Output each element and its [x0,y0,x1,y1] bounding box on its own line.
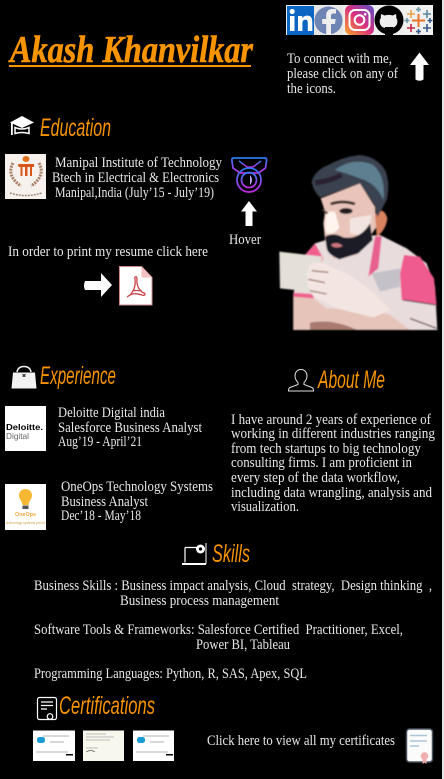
heading: education: Education [40,114,111,142]
text: business skills: Business process management [120,593,279,609]
heading: certifications [38,692,155,720]
logo: oneops: OneOps [15,512,36,518]
logo: deloitte digital: Digital [6,431,29,441]
text: view certificates: Click here to view all my certificates [207,733,395,749]
text: deloitte role: Salesforce Business Analyst [58,420,202,436]
icon: person [288,370,314,391]
hand [307,263,391,317]
icon: linkedin [287,6,314,35]
portrait photo [279,155,437,330]
cup [279,252,323,292]
heading: about me [288,366,385,394]
heading: experience: Experience [40,362,116,390]
logo: oneops: technology systems pvt ltd [6,521,45,525]
icon: facebook [314,6,343,35]
text: oneops role: Business Analyst [61,494,148,510]
text: connect note: the icons. [287,81,336,97]
title: name: Akash Khanvilkar [8,29,254,71]
torso [293,235,437,330]
social icons row [286,5,433,35]
text: oneops role: Dec’18 - May’18 [61,508,141,524]
text: oneops role [61,479,213,524]
logo: deloitte digital: Deloitte. [6,422,43,432]
icon: tableau [404,5,433,35]
arrow: up to medal [241,201,257,226]
text: education details: Manipal,India (July’15 - July’19) [55,185,214,201]
text: software tools [34,622,403,653]
icon: pdf file [120,266,152,305]
brows and eye [331,202,355,204]
text: education details: Btech in Electrical & Electronics [52,170,219,186]
logo: deloitte digital [5,406,46,451]
icon: certificate document [38,698,56,720]
text: education details: Manipal Institute of Technology [55,155,223,171]
text: programming languages: Programming Languages: Python, R, SAS, Apex, SQL [34,666,307,682]
heading: skills [182,540,250,568]
hair [312,155,388,217]
heading: certifications: Certifications [59,692,155,720]
text: business skills [34,578,432,609]
text: about paragraph: consulting firms. I am proficient in [231,455,413,471]
text: about paragraph: from tech startups to big technology [231,441,422,457]
face [321,183,377,258]
beard [325,223,373,259]
text: hover: Hover [229,232,261,248]
certificate thumbnail 2 [83,730,124,761]
icon: certificate [406,729,432,764]
text: about paragraph: visualization. [231,499,299,515]
text: oneops role: OneOps Technology Systems [61,479,213,495]
icon: instagram [345,5,374,35]
icon: medal [232,158,267,192]
text: connect note: please click on any of [287,66,398,82]
arrow: up to social icons [410,52,429,81]
text: connect note [287,51,398,97]
logo: manipal institute [5,154,46,199]
text: deloitte role: Deloitte Digital india [58,405,165,421]
text: deloitte role: Aug’19 - April’21 [58,434,142,450]
icon: github [374,5,404,35]
heading: skills: Skills [212,540,250,568]
certificate thumbnail 3 [133,730,174,761]
certificate thumbnail 1 [33,730,75,761]
arm [293,297,410,330]
heading: experience [12,362,116,390]
arrow: right to pdf [84,273,112,297]
text: software tools: Power BI, Tableau [196,637,290,653]
text: about paragraph [231,412,435,515]
text: education details [52,155,223,201]
logo: oneops [5,484,46,530]
text: deloitte role [58,405,202,450]
text: software tools: Software Tools & Frameworks: Salesforce Certified Practitioner, Excel, [34,622,403,638]
text: connect note: To connect with me, [287,51,392,67]
text: about paragraph: every step of the data workflow, [231,470,400,486]
icon: graduation cap [10,116,34,135]
icon: handbag [12,366,36,388]
text: print resume: In order to print my resume click here [8,244,208,260]
heading: about me: About Me [317,366,385,394]
heading: education [10,114,111,142]
icon: laptop with gear [182,543,206,564]
